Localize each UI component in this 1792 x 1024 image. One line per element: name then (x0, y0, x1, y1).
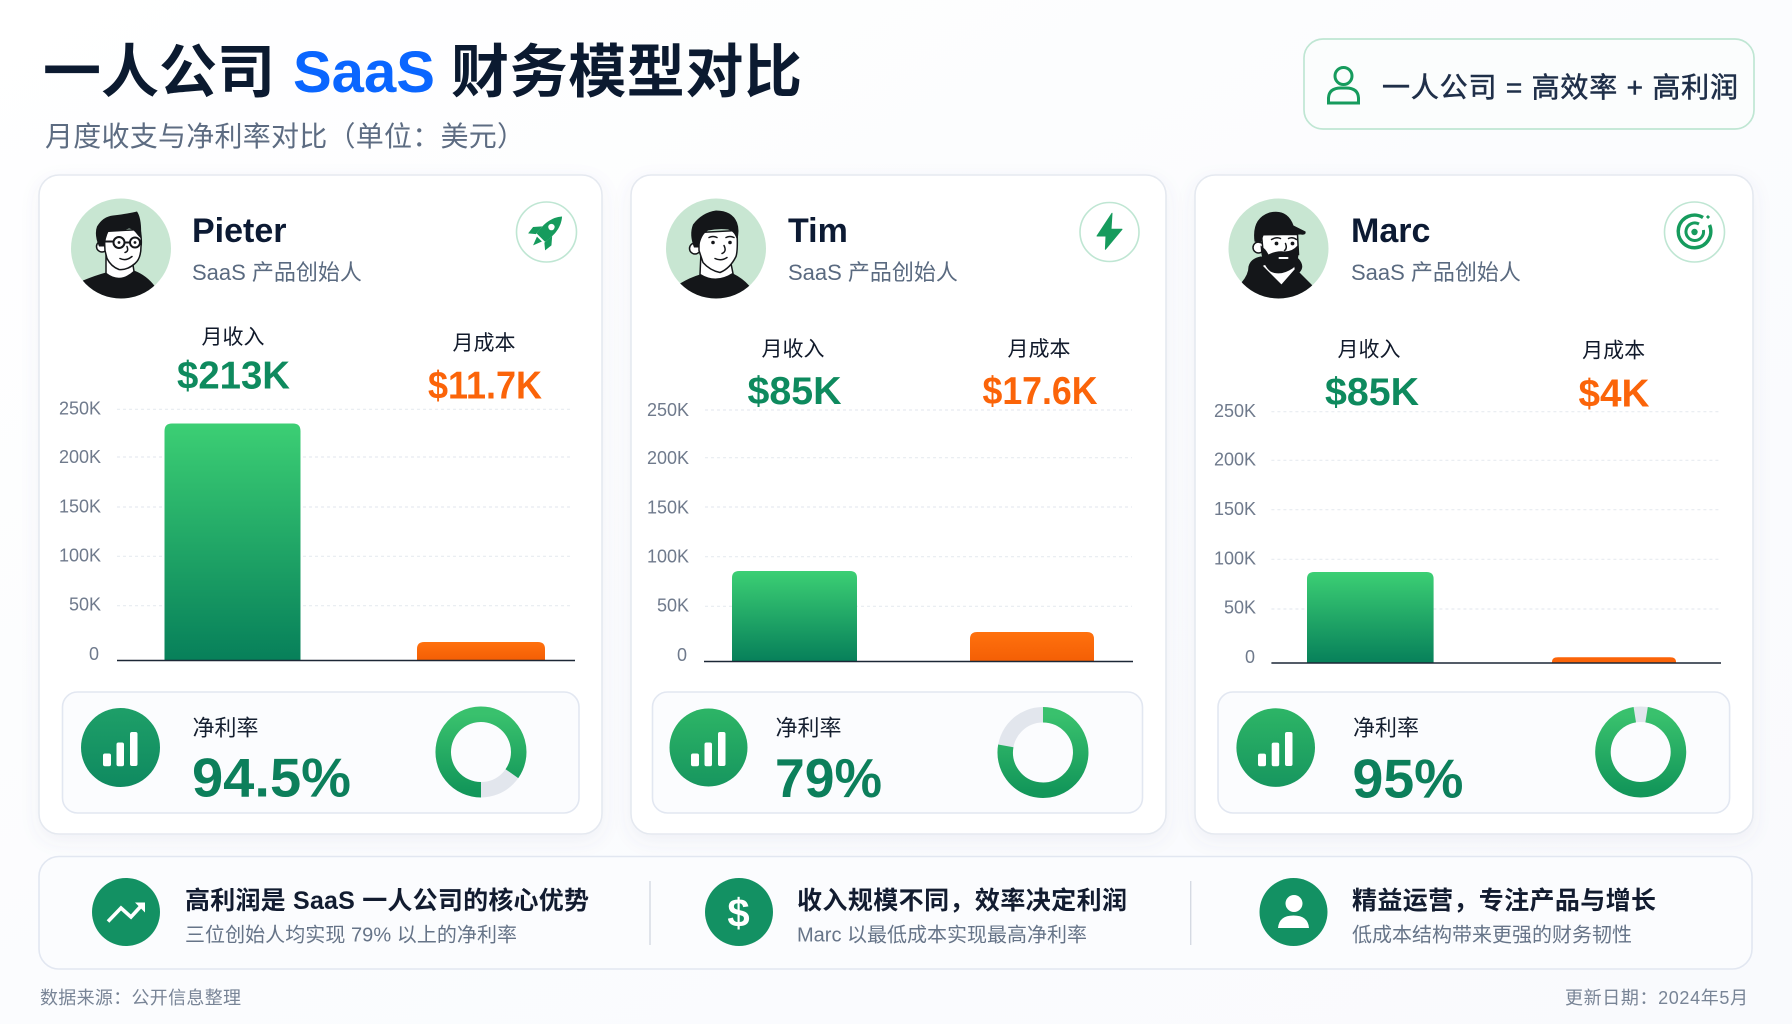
revenue label: 月收入 (202, 326, 264, 349)
icon: target (1664, 202, 1724, 262)
title: 一人公司 (43, 40, 275, 105)
cost value: $17.6K (982, 370, 1098, 413)
cost label: 月成本 (1582, 340, 1645, 362)
net margin label: 净利率 (1353, 716, 1419, 740)
bar chart: Tim: 100K (647, 546, 689, 566)
bar chart: Marc: 50K (1224, 598, 1256, 618)
callout text: 一人公司 = 高效率 + 高利润 (1382, 72, 1738, 103)
icon: lightning bolt (1080, 202, 1139, 262)
icon: signal bars (81, 708, 160, 787)
net margin box (652, 692, 1142, 813)
name: Pieter (192, 212, 286, 250)
bar chart: Marc: 0 (1245, 647, 1255, 667)
name: Marc (1351, 212, 1430, 250)
net margin box (1218, 692, 1730, 813)
title: 财务模型对比 (451, 40, 803, 105)
takeaway 1: 高利润是 SaaS 一人公司的核心优势 (185, 887, 589, 915)
icon: dollar: $ (727, 892, 750, 936)
cost value: $11.7K (428, 364, 542, 408)
takeaway 1: 三位创始人均实现 79% 以上的净利率 (185, 924, 517, 946)
donut chart (443, 714, 519, 790)
panel: Pieter (39, 175, 602, 834)
revenue bar (1307, 572, 1434, 663)
net margin value: 95% (1352, 747, 1464, 809)
bar chart: Tim: 50K (657, 596, 689, 616)
bar chart: Pieter: 150K (59, 496, 101, 516)
name: Tim (788, 212, 848, 250)
donut chart (1005, 715, 1081, 790)
cost bar (970, 632, 1094, 661)
donut chart (1603, 714, 1678, 790)
panel: Tim (631, 175, 1166, 834)
revenue label: 月收入 (762, 338, 824, 361)
bar chart: Tim: 150K (647, 498, 689, 518)
bar chart: Tim (647, 400, 1133, 665)
net margin label: 净利率 (192, 716, 259, 740)
icon: trend arrow (92, 878, 160, 946)
takeaway 3: 低成本结构带来更强的财务韧性 (1352, 924, 1632, 946)
net margin value: 94.5% (192, 747, 351, 809)
bar chart: Tim: 0 (677, 645, 687, 665)
cost value: $4K (1578, 372, 1650, 416)
bar chart: Marc (1214, 401, 1721, 667)
revenue bar (732, 571, 857, 661)
takeaway 3 (1352, 887, 1656, 946)
bar chart: Pieter: 50K (69, 594, 101, 614)
bar chart: Pieter: 250K (59, 398, 101, 418)
avatar: Pieter (71, 198, 171, 298)
avatar: Tim (666, 198, 766, 298)
cost label: 月成本 (1008, 338, 1070, 361)
takeaway 2 (797, 887, 1127, 946)
role: SaaS 产品创始人 (1351, 260, 1521, 285)
subtitle: 月度收支与净利率对比（单位：美元） (45, 121, 525, 152)
cost bar (1552, 657, 1676, 663)
net margin box (62, 692, 579, 813)
panel: Marc (1195, 175, 1753, 834)
cost bar (417, 642, 545, 660)
bar chart: Tim: 250K (647, 400, 689, 420)
icon: user outline (1328, 68, 1358, 103)
revenue bar (164, 424, 300, 660)
bar chart: Pieter: 100K (59, 546, 101, 566)
takeaway 3: 精益运营，专注产品与增长 (1352, 887, 1656, 915)
icon: signal bars (1236, 708, 1315, 787)
cost label: 月成本 (452, 332, 516, 355)
net margin value: 79% (775, 747, 882, 809)
revenue value: $85K (748, 370, 842, 413)
icon: dollar (705, 878, 773, 946)
net margin label: 净利率 (776, 716, 842, 740)
role: SaaS 产品创始人 (192, 260, 362, 285)
icon: rocket (516, 202, 576, 262)
takeaway 2: 收入规模不同，效率决定利润 (797, 887, 1127, 915)
bar chart: Marc: 200K (1214, 450, 1256, 470)
icon: person (1260, 878, 1328, 946)
title: SaaS (293, 40, 435, 105)
revenue label: 月收入 (1338, 338, 1400, 362)
bar chart: Marc: 150K (1214, 499, 1256, 519)
bar chart: Marc: 250K (1214, 401, 1256, 421)
update date: 更新日期：2024年5月 (1565, 988, 1748, 1008)
role: SaaS 产品创始人 (788, 260, 958, 285)
bar chart: Tim: 200K (647, 448, 689, 468)
revenue value: $213K (177, 354, 290, 398)
avatar: Marc (1228, 198, 1328, 298)
callout: formula (1304, 39, 1754, 129)
bar chart: Pieter (59, 398, 575, 664)
icon: signal bars (670, 708, 748, 786)
bar chart: Marc: 100K (1214, 548, 1256, 568)
takeaway 1 (185, 887, 589, 946)
bar chart: Pieter: 0 (89, 644, 99, 664)
panel: key takeaways (39, 856, 1752, 969)
bar chart: Pieter: 200K (59, 447, 101, 467)
takeaway 2: Marc 以最低成本实现最高净利率 (797, 924, 1087, 946)
revenue value: $85K (1325, 371, 1419, 414)
source note: 数据来源：公开信息整理 (40, 988, 241, 1008)
